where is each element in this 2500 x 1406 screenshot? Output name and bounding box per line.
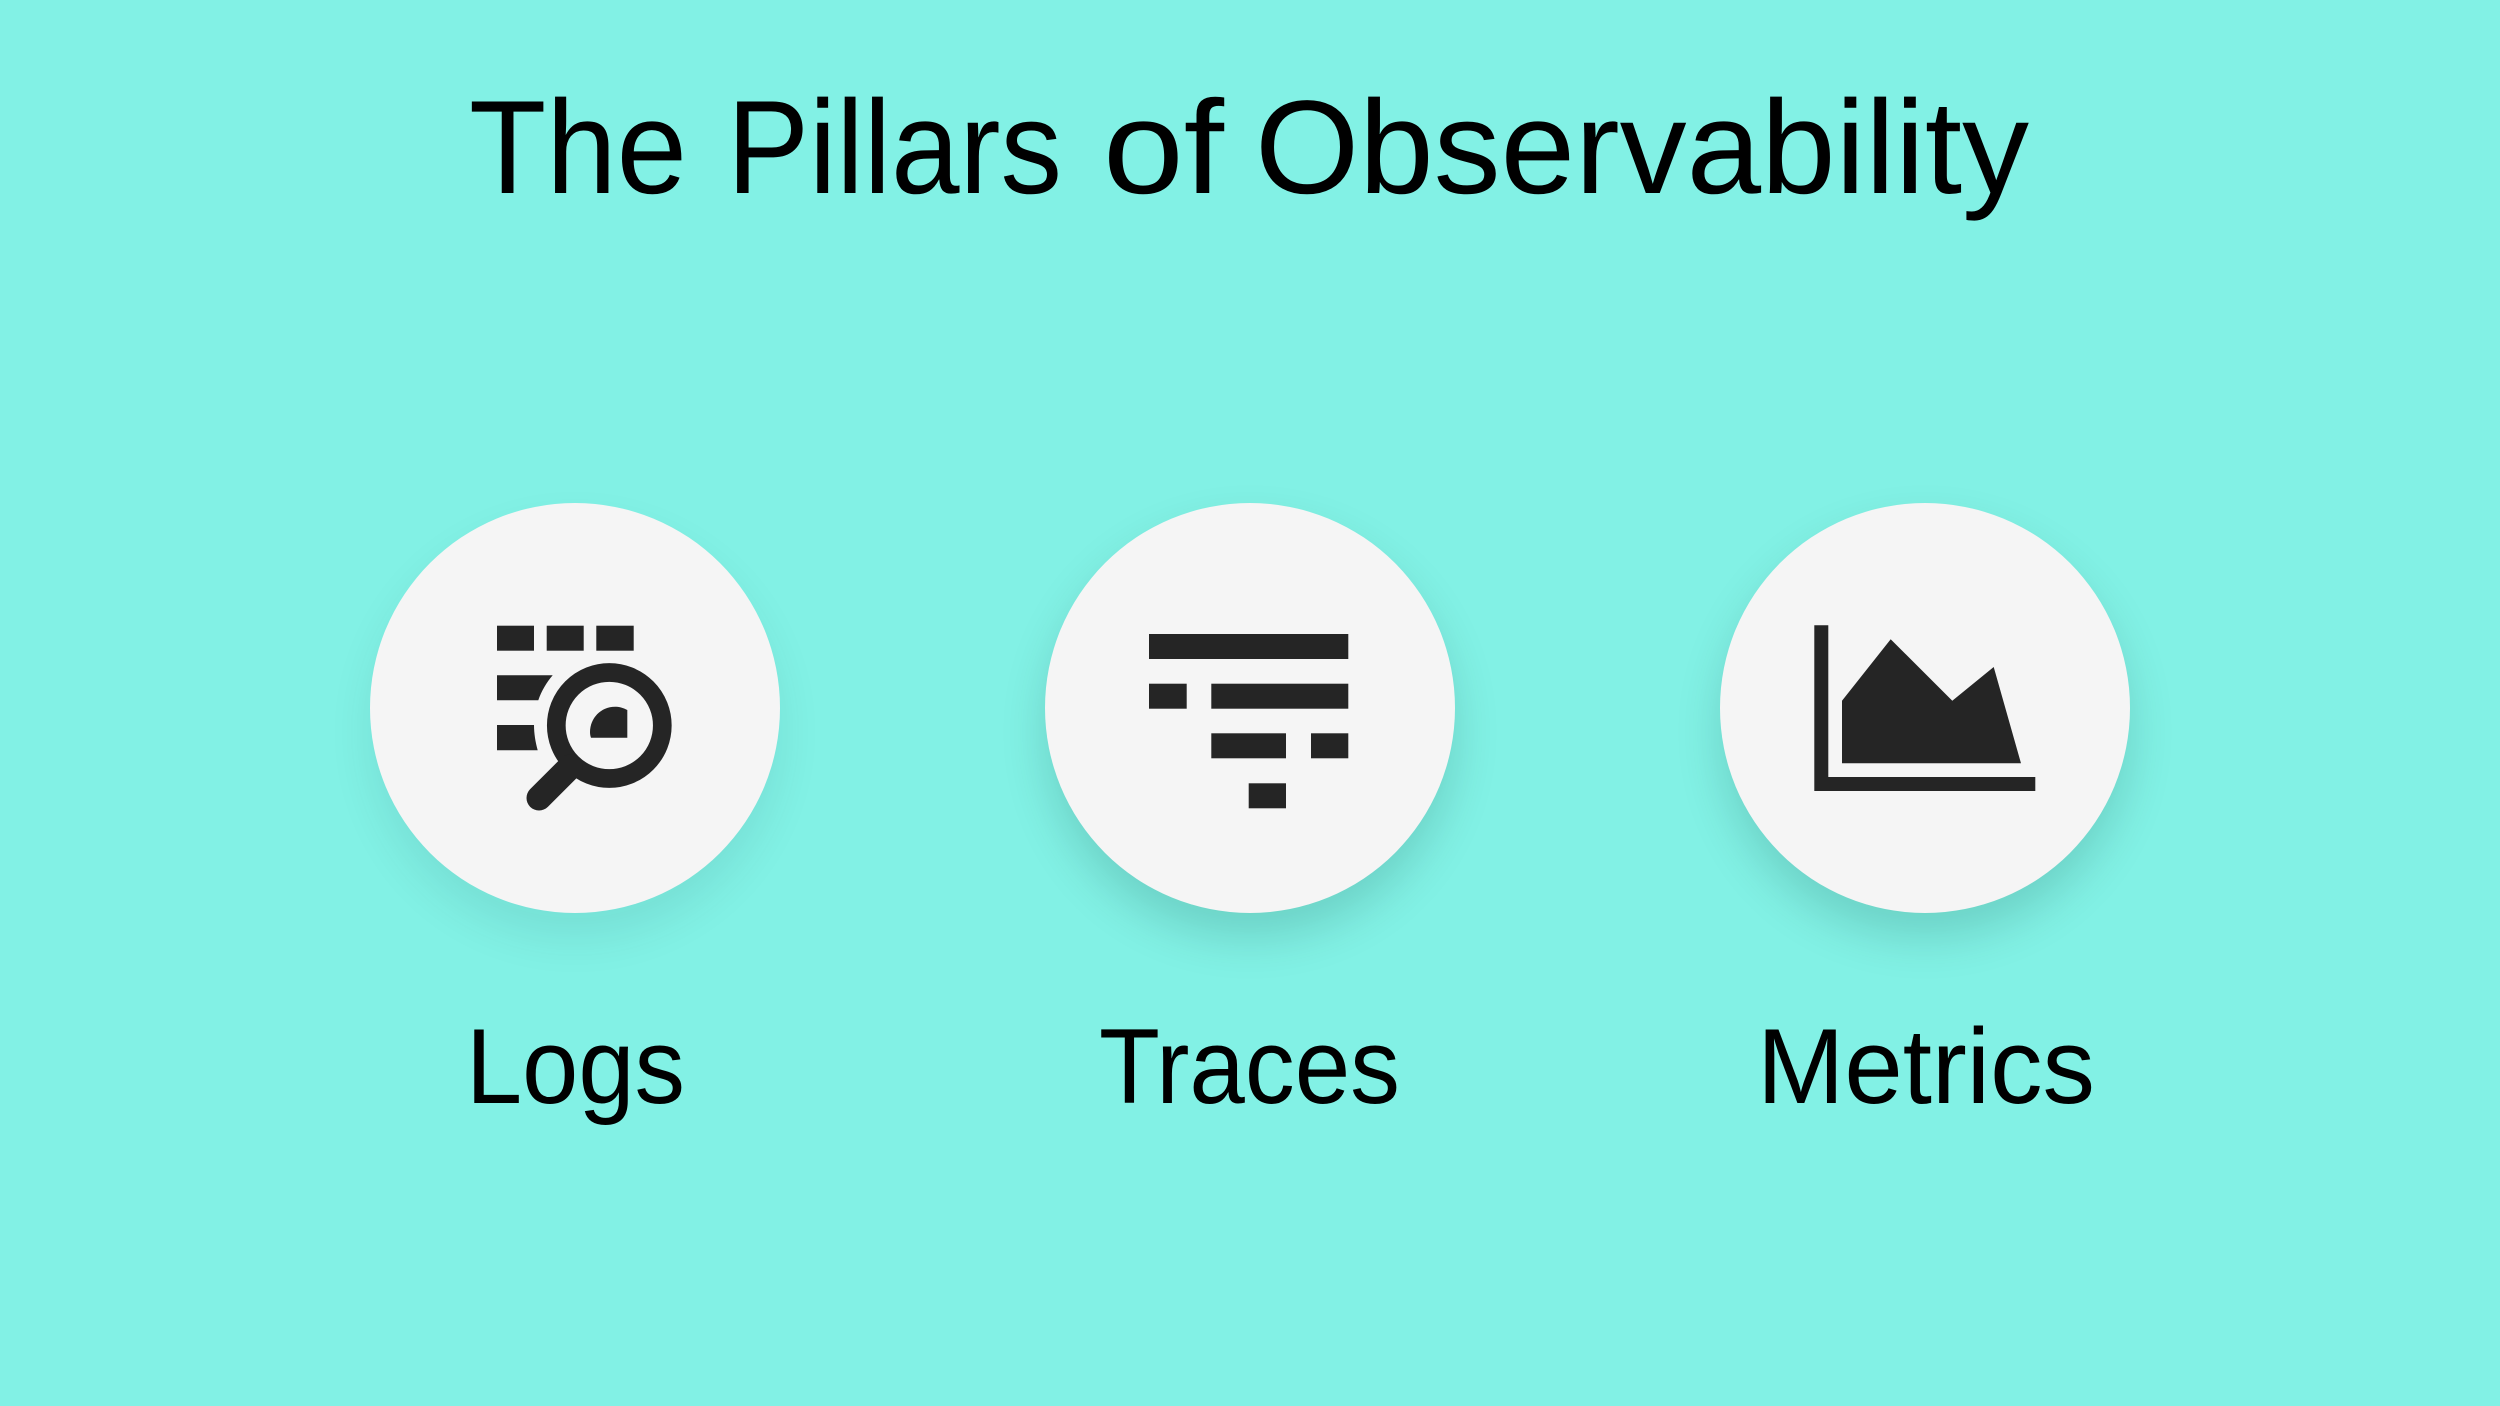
- title: The: [469, 74, 687, 222]
- title: Observability: [1255, 74, 2029, 222]
- panel: Traces: [1032, 503, 1468, 1126]
- circle: Metrics: [1720, 503, 2130, 913]
- circle: Logs: [370, 503, 780, 913]
- panel: Metrics: [1706, 503, 2144, 1126]
- icon: trace waterfall bars: [1149, 634, 1348, 808]
- title: Pillars: [727, 74, 1062, 222]
- circle: Traces: [1045, 503, 1455, 913]
- title: of: [1103, 74, 1225, 222]
- title: [469, 74, 2029, 222]
- icon: log table with magnifying glass: [497, 626, 672, 810]
- panel: Logs: [370, 503, 780, 1126]
- icon: area chart: [1814, 625, 2036, 791]
